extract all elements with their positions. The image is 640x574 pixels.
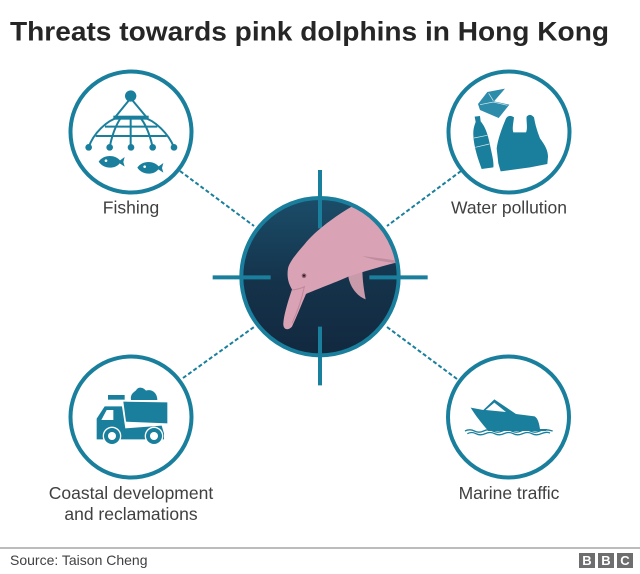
BBC logo: C — [620, 553, 630, 568]
traffic ring — [448, 356, 569, 478]
label: fishing: Fishing — [103, 198, 159, 218]
coastal ring — [70, 356, 192, 478]
dashed connectors — [180, 171, 461, 379]
pollution ring — [448, 72, 570, 192]
fishing ring — [70, 72, 192, 192]
panel: marine traffic — [448, 356, 569, 503]
target disc — [241, 198, 399, 355]
panel: dolphin target — [213, 170, 428, 385]
panel: water pollution — [448, 72, 570, 218]
source: Source: Taison Cheng — [10, 552, 148, 568]
panel: fishing — [70, 72, 192, 218]
label: marine traffic: Marine traffic — [459, 483, 560, 503]
icon: fishing net and fish — [85, 90, 177, 174]
crosshair — [213, 170, 428, 385]
BBC logo: B — [582, 553, 592, 568]
panel: coastal development — [49, 356, 213, 524]
icon: food box, bottle and plastic bag — [473, 89, 548, 171]
label: coastal development: Coastal development — [49, 483, 213, 503]
BBC logo: B — [601, 553, 611, 568]
icon: boat on waves — [465, 399, 553, 435]
panel: coastal development: and reclamations — [64, 504, 198, 524]
title: Threats towards pink dolphins in Hong Kong — [10, 16, 609, 46]
label: water pollution: Water pollution — [451, 198, 567, 218]
icon: dump truck — [97, 388, 167, 445]
footer divider — [0, 547, 640, 549]
dolphin — [283, 203, 400, 329]
BBC logo — [579, 553, 633, 568]
